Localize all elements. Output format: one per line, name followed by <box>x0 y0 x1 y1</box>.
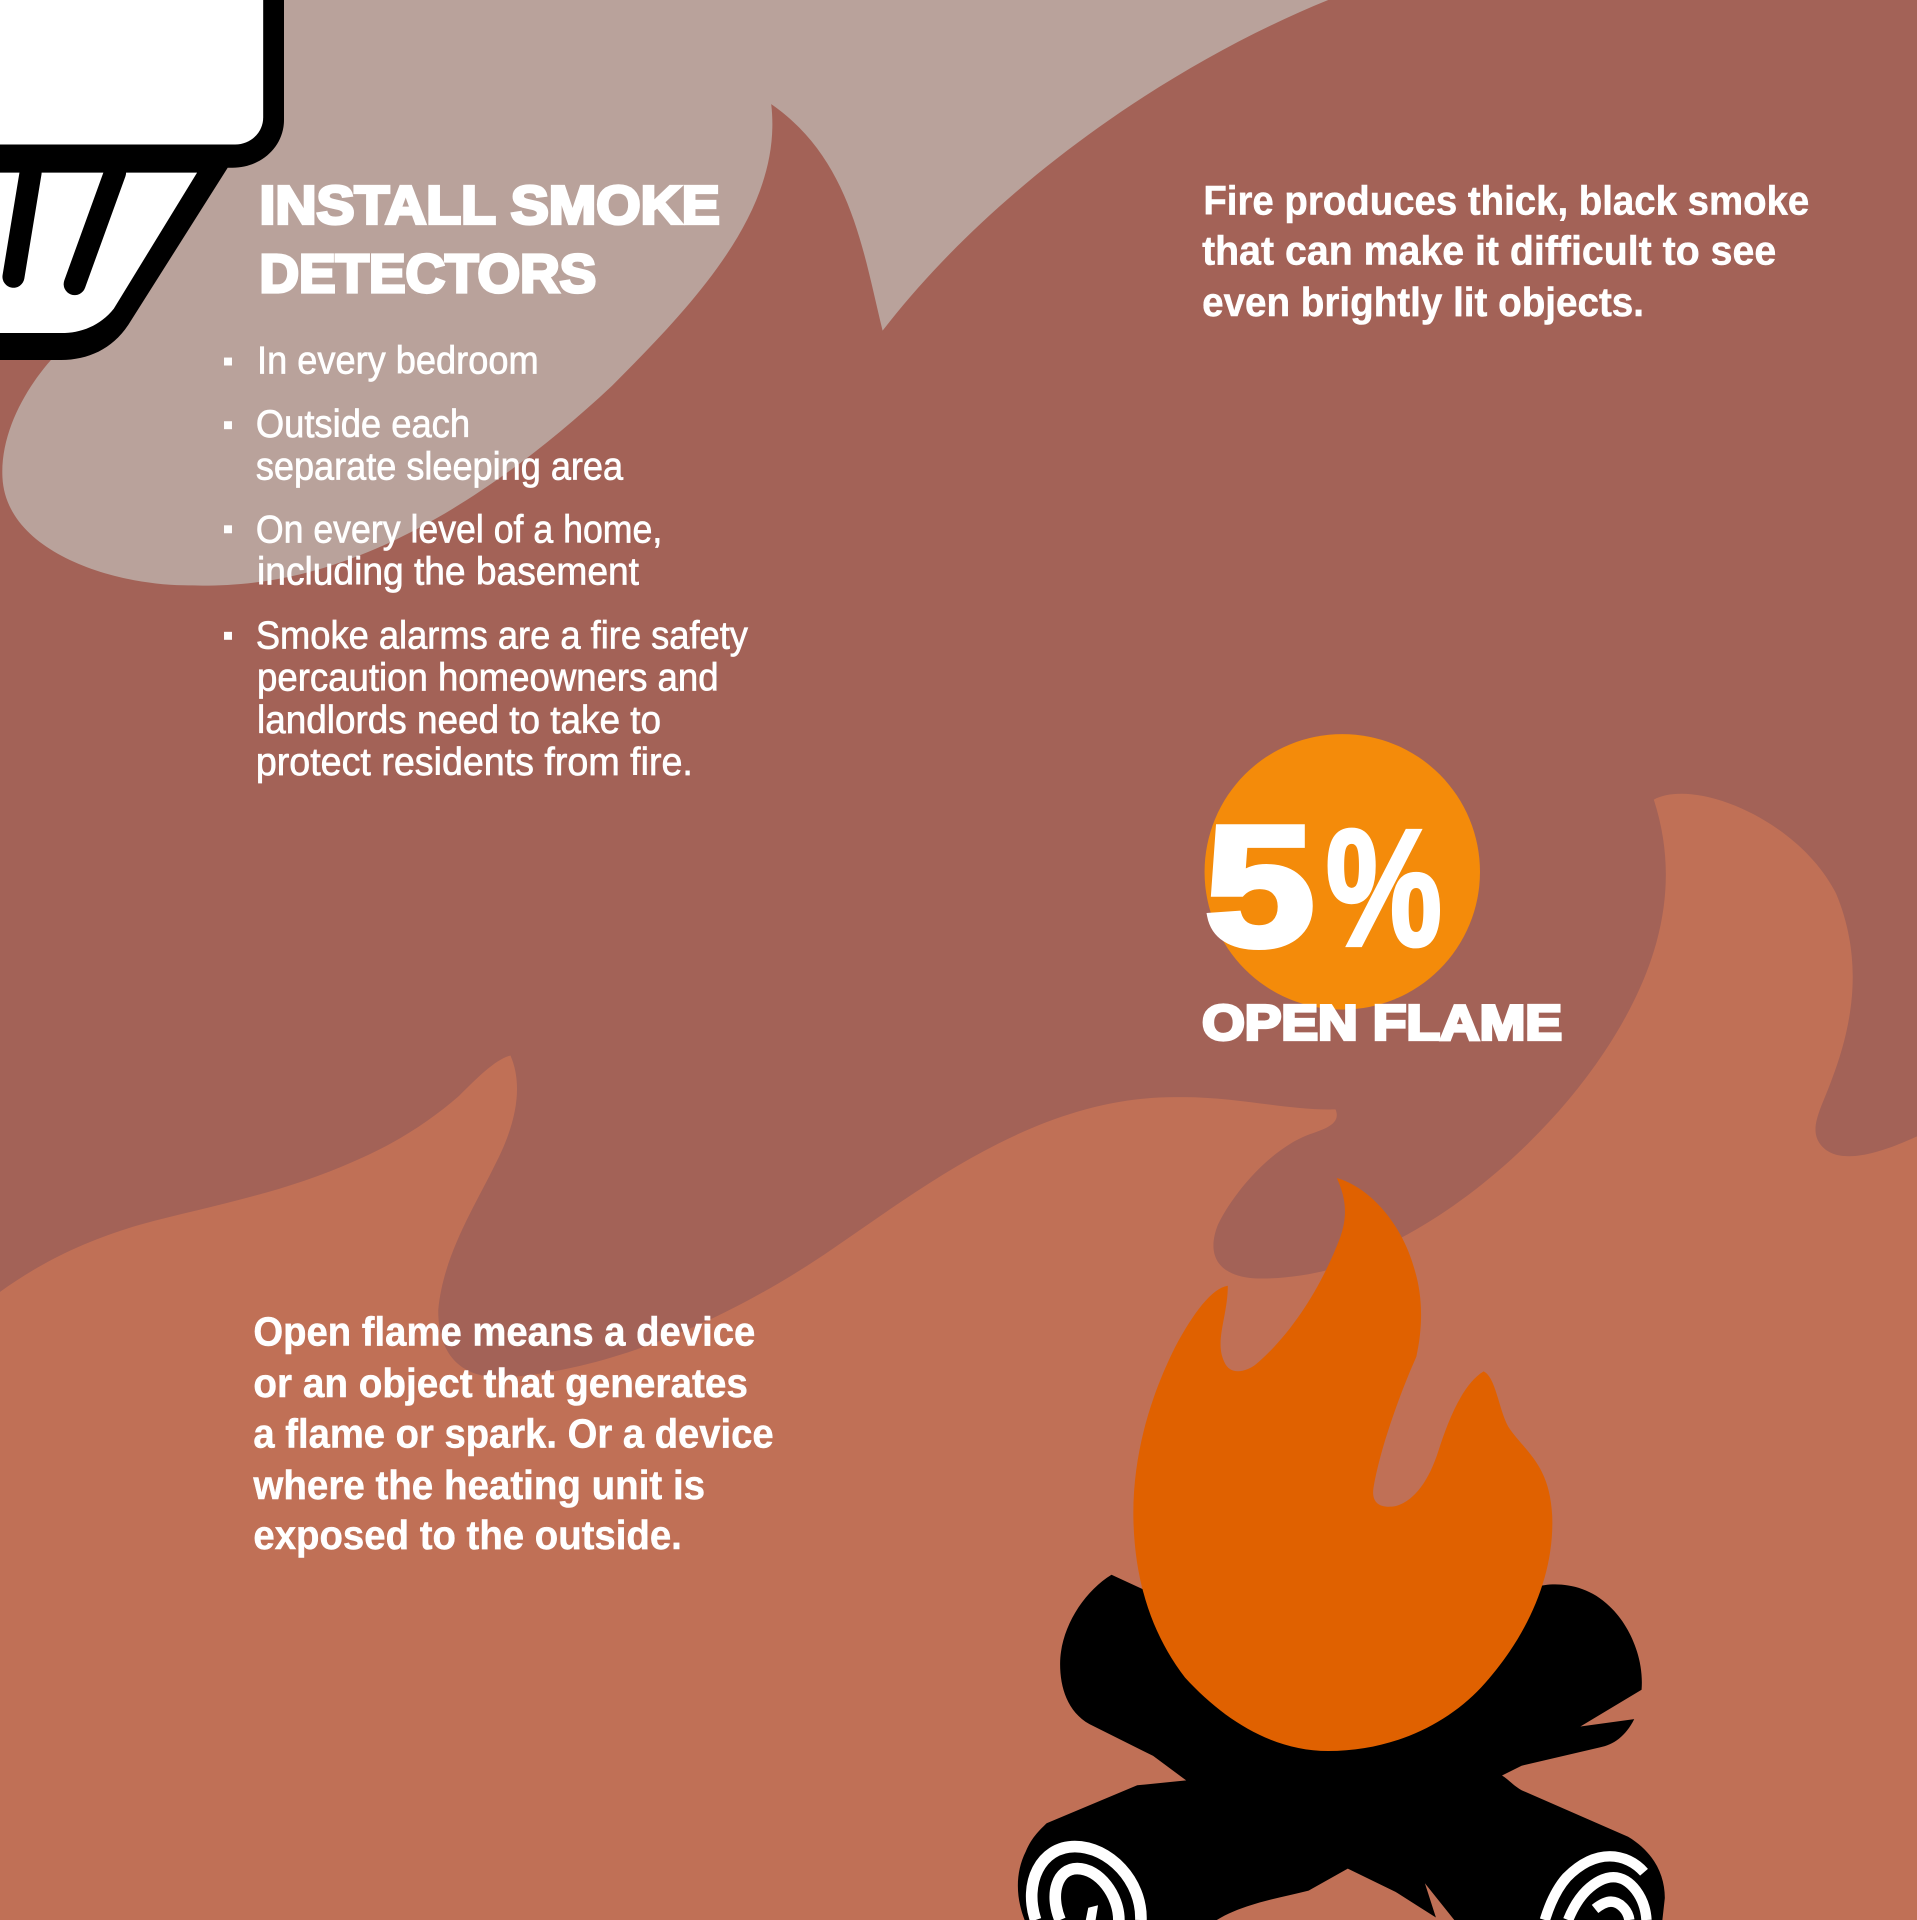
bullet list: detector placement: On every level of a home, <box>256 508 662 551</box>
statistic: 5%: % <box>1326 795 1442 981</box>
bullet list: detector placement <box>224 339 749 784</box>
text block: open flame definition <box>252 1309 774 1558</box>
icon: campfire flame <box>1133 1178 1552 1751</box>
text block: thick black smoke: Fire produces thick, black smoke <box>1203 177 1809 223</box>
bullet list: detector placement: including the basement <box>257 551 639 594</box>
text block: open flame definition: where the heating unit is <box>252 1462 705 1508</box>
text block: thick black smoke <box>1202 177 1809 325</box>
bullet list: detector placement: landlords need to take to <box>257 699 661 742</box>
bullet list: detector placement: protect residents from fire. <box>256 741 693 784</box>
statistic: 5% <box>1205 791 1442 982</box>
heading: install smoke detectors: INSTALL SMOKE <box>260 175 720 235</box>
bullet list: detector placement: separate sleeping area <box>256 445 624 488</box>
bullet list: detector placement: percaution homeowners and <box>257 657 719 700</box>
icon: left log spiral <box>1032 1847 1141 1920</box>
text block: thick black smoke: that can make it difficult to see <box>1202 227 1776 273</box>
heading: install smoke detectors: DETECTORS <box>260 244 596 304</box>
label: open flame: OPEN FLAME <box>1202 997 1562 1051</box>
bullet list: detector placement: Smoke alarms are a fire safety <box>256 614 749 657</box>
text block: open flame definition: exposed to the outside. <box>253 1512 682 1558</box>
smoke cloud shape <box>2 0 1328 586</box>
statistic: 5%: 5 <box>1205 791 1315 982</box>
orange circle behind statistic <box>1205 734 1480 1010</box>
icon: campfire logs <box>1018 1575 1665 1920</box>
icon: right log spiral <box>1545 1856 1646 1920</box>
bullet list: detector placement: Outside each <box>256 403 470 446</box>
text block: open flame definition: a flame or spark. Or a device <box>253 1410 774 1456</box>
heading: install smoke detectors <box>260 175 720 304</box>
text block: open flame definition: Open flame means a device <box>253 1309 755 1355</box>
bullet list: detector placement: In every bedroom <box>257 339 539 382</box>
text block: open flame definition: or an object that generates <box>253 1360 748 1406</box>
text block: thick black smoke: even brightly lit objects. <box>1202 279 1644 325</box>
lower flame background <box>0 794 1917 1920</box>
smoke detector icon <box>0 0 284 360</box>
